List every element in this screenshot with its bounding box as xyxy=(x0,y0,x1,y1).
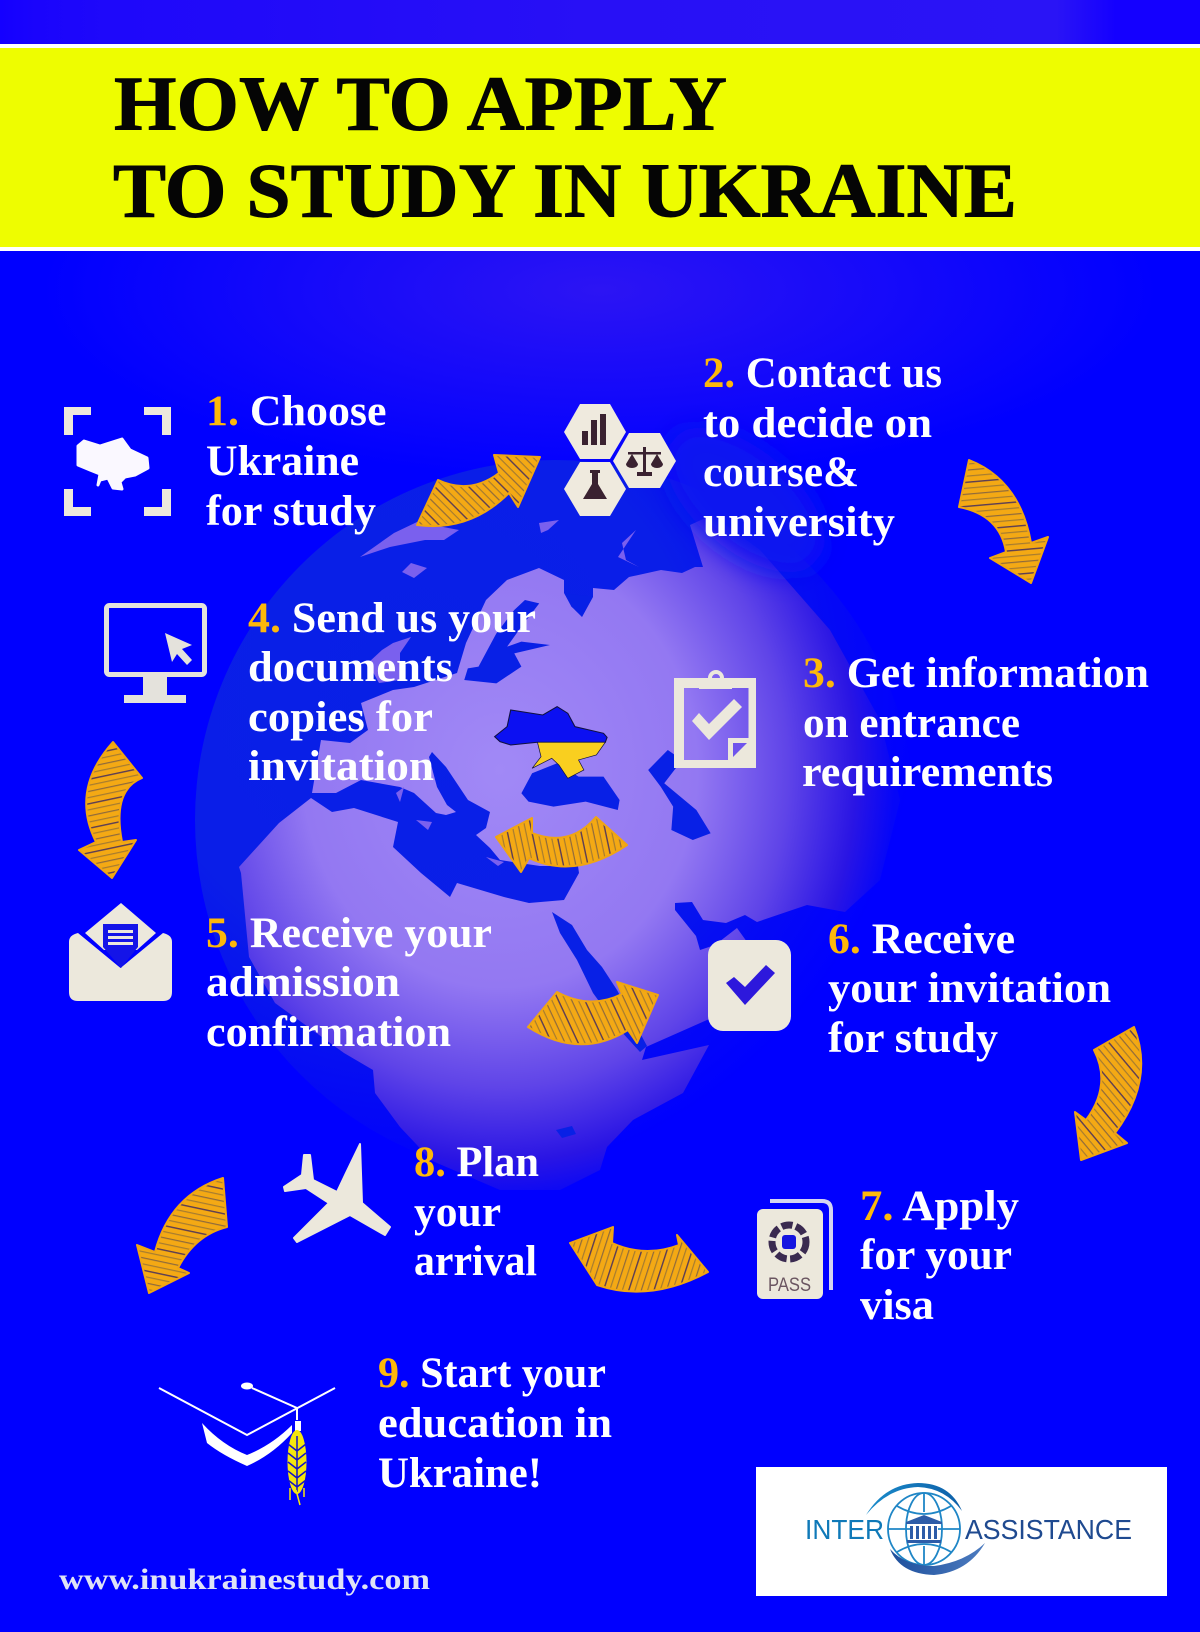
step 9 text: 9. Start your xyxy=(378,1350,606,1397)
step 8 text xyxy=(414,1139,539,1285)
arrow 3 to 4 xyxy=(496,817,627,872)
logo swooshes xyxy=(866,1483,962,1515)
landmass: Eurasia and Africa xyxy=(239,515,900,1190)
title: HOW TO APPLY xyxy=(114,60,727,146)
step 9 text: education in xyxy=(378,1400,612,1447)
arrow 2 to 3 xyxy=(959,460,1048,583)
step 8 text: your xyxy=(414,1189,501,1236)
website url: www.inukrainestudy.com xyxy=(59,1563,430,1596)
icon: hexagons xyxy=(564,404,676,516)
arrow 4 to 5 xyxy=(79,742,142,878)
step 1 text: 1. Choose xyxy=(206,388,386,435)
step 6 text: for study xyxy=(828,1015,999,1062)
step 4 text xyxy=(248,595,536,790)
icon: passport xyxy=(757,1201,831,1299)
arrow 8 to 9 xyxy=(137,1178,227,1293)
step 7 text: for your xyxy=(860,1232,1012,1279)
step 5 text: admission xyxy=(206,959,400,1006)
step 3 text: 3. Get information xyxy=(803,650,1149,697)
seas xyxy=(464,593,711,840)
arrow 5 to 6 xyxy=(528,982,658,1044)
header band xyxy=(0,44,1200,251)
step 1 text xyxy=(206,388,386,535)
icon: envelope xyxy=(69,903,172,1001)
icon: Ukraine map in frame xyxy=(64,407,171,516)
step 2 text: course& xyxy=(703,449,859,496)
icon: computer monitor xyxy=(106,606,204,703)
icon: clipboard xyxy=(674,670,756,768)
step 9 text xyxy=(378,1350,612,1497)
feathered north-east globe edge xyxy=(640,401,850,599)
step 6 text xyxy=(828,916,1111,1062)
icon: check box xyxy=(708,940,791,1031)
step 6 text: your invitation xyxy=(828,965,1111,1012)
title xyxy=(113,60,1017,234)
world globe map xyxy=(195,401,915,1190)
step 3 text: requirements xyxy=(802,749,1053,796)
logo wordmark: INTER xyxy=(805,1514,884,1545)
Ukraine on map xyxy=(495,707,607,778)
step 2 text xyxy=(703,350,942,546)
step 4 text: documents xyxy=(248,644,453,691)
step 3 text xyxy=(802,650,1149,796)
step 7 text: visa xyxy=(860,1282,934,1329)
step 7 text: 7. Apply xyxy=(860,1183,1020,1230)
islands xyxy=(360,520,639,866)
step 8 text: 8. Plan xyxy=(414,1139,539,1186)
step 4 text: 4. Send us your xyxy=(248,595,536,642)
step 1 text: Ukraine xyxy=(206,438,359,485)
arrow 7 to 8 xyxy=(570,1227,708,1292)
logo globe xyxy=(888,1493,960,1565)
step 3 text: on entrance xyxy=(803,700,1020,747)
icon: airplane xyxy=(284,1144,390,1242)
step 2 text: to decide on xyxy=(703,400,932,447)
arrow 6 to 7 xyxy=(1075,1027,1141,1160)
Madagascar-side island xyxy=(556,1126,576,1138)
title: TO STUDY IN UKRAINE xyxy=(113,148,1017,234)
step 5 text: confirmation xyxy=(206,1009,451,1056)
logo: Inter Assistance: ASSISTANCE xyxy=(965,1514,1132,1545)
icon: graduation cap with wheat tassel xyxy=(159,1382,335,1505)
step 2 text: 2. Contact us xyxy=(703,350,942,397)
icon: passport: PASS xyxy=(768,1275,811,1296)
step 6 text: 6. Receive xyxy=(828,916,1015,963)
arrow 1 to 2 xyxy=(417,455,540,526)
step 8 text: arrival xyxy=(414,1238,537,1285)
logo: Inter Assistance xyxy=(756,1467,1167,1596)
step 1 text: for study xyxy=(206,488,377,535)
step 4 text: copies for xyxy=(248,694,433,741)
logo building xyxy=(906,1515,942,1543)
step 7 text xyxy=(860,1183,1020,1329)
step 9 text: Ukraine! xyxy=(378,1450,542,1497)
step 2 text: university xyxy=(703,499,896,546)
step 5 text: 5. Receive your xyxy=(206,910,492,957)
step 5 text xyxy=(206,910,492,1056)
step 4 text: invitation xyxy=(248,743,434,790)
